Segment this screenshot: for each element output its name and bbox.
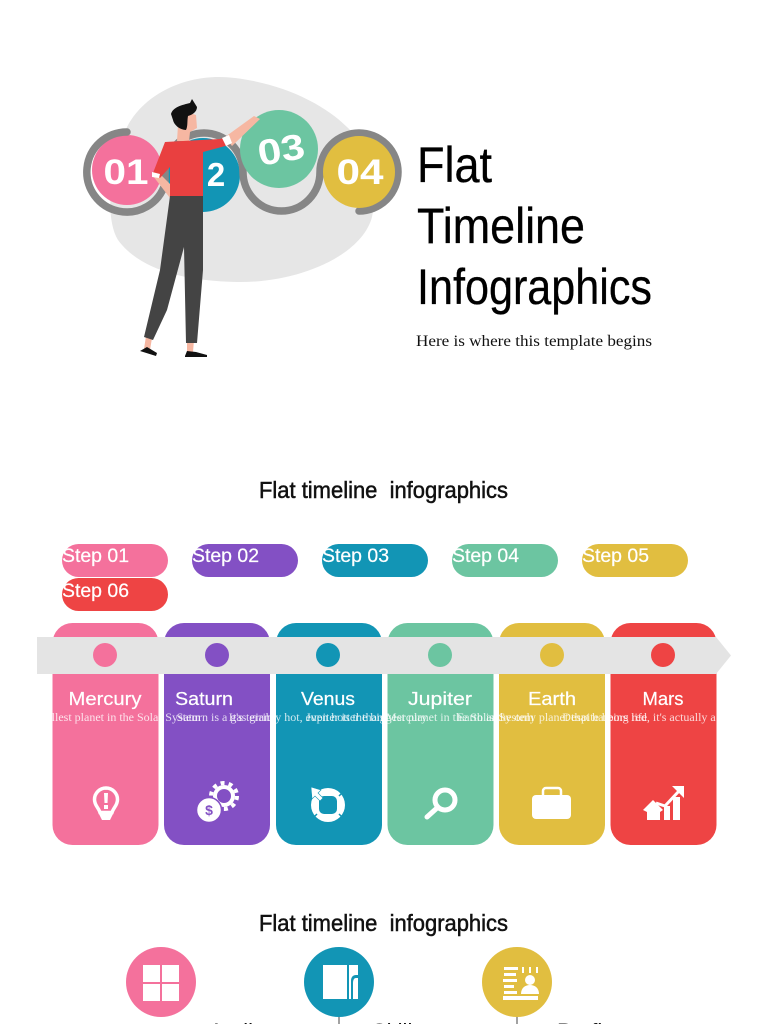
- card descriptions: Jupiter is the biggest planet in the Solar System: [306, 710, 535, 724]
- winding road: [87, 132, 398, 212]
- card: venus: [276, 623, 382, 845]
- subtitle: Here is where this template begins: [416, 333, 652, 350]
- circle 03: [240, 110, 318, 188]
- icon: briefcase: [532, 788, 571, 819]
- card: saturn: [164, 623, 270, 845]
- step pills: [62, 544, 688, 611]
- timeline dots: [93, 643, 675, 667]
- step 05: [582, 544, 688, 577]
- background blob: [110, 77, 374, 282]
- circle 04: [323, 136, 395, 208]
- title: Timeline: [417, 198, 585, 254]
- circle 03: 03: [254, 125, 308, 174]
- card descriptions: Earth is the only planet that harbors life: [457, 710, 647, 724]
- step 01: [62, 544, 168, 577]
- bottom item: pink: [126, 947, 196, 1017]
- icon: magnifier: [427, 790, 455, 817]
- step 04: [452, 544, 558, 577]
- icon: circular target: [311, 787, 345, 822]
- head and neck: [177, 112, 197, 141]
- section heading: bottom: Flat timeline infographics: [259, 910, 508, 936]
- icon: coins and person: [503, 967, 539, 1000]
- card descriptions: [0, 710, 768, 724]
- title: [417, 137, 652, 315]
- hero illustration: [87, 77, 398, 357]
- step 03: [322, 544, 428, 577]
- circle 01: 01: [104, 153, 148, 192]
- step 04: Step 04: [452, 546, 519, 567]
- connector: [338, 1017, 340, 1024]
- card names: Venus: [301, 689, 355, 709]
- lower arm: [153, 176, 172, 198]
- card: mars: [610, 623, 716, 845]
- card names: Saturn: [175, 689, 233, 709]
- bottom item: teal: [304, 947, 374, 1024]
- card descriptions: It's terribly hot, even hotter than Mercury: [229, 710, 427, 724]
- connector: [516, 1017, 518, 1024]
- step 02: Step 02: [192, 546, 259, 567]
- step 06: [62, 578, 168, 611]
- card: earth: [499, 623, 605, 845]
- shoes: [140, 347, 207, 357]
- icon: growth chart: [643, 786, 684, 820]
- icon: notebook and pen: [323, 965, 358, 999]
- circle 01: [92, 135, 162, 205]
- icon: gear and dollar: [196, 783, 237, 822]
- hair: [171, 99, 197, 130]
- icon: light bulb: [94, 788, 118, 820]
- icon: gear and dollar: $: [205, 802, 213, 818]
- card names: Jupiter: [408, 689, 472, 709]
- section heading: timeline: Flat timeline infographics: [259, 477, 508, 503]
- card: jupiter: [388, 623, 494, 845]
- title: Flat: [417, 137, 492, 193]
- step 03: Step 03: [322, 546, 389, 567]
- trousers: [144, 196, 203, 343]
- step 06: Step 06: [62, 581, 129, 602]
- card names: Mars: [642, 689, 684, 709]
- card names: [68, 689, 684, 709]
- circle 04: 04: [336, 153, 384, 192]
- cuffs: [152, 135, 232, 178]
- card descriptions: Despite being red, it's actually a cold place: [562, 710, 768, 724]
- person: [140, 99, 260, 357]
- card descriptions: Saturn is a gas giant: [177, 710, 274, 724]
- raised arm: [225, 116, 260, 146]
- shirt: [153, 137, 229, 196]
- title: Infographics: [417, 259, 652, 315]
- timeline cards: [52, 623, 716, 845]
- card names: Mercury: [68, 689, 142, 709]
- step 01: Step 01: [62, 546, 129, 567]
- card: mercury: [52, 623, 158, 845]
- timeline arrow: [37, 637, 731, 674]
- ankles: [144, 336, 194, 352]
- bottom item: yellow: [482, 947, 552, 1024]
- step 05: Step 05: [582, 546, 649, 567]
- step 02: [192, 544, 298, 577]
- icon: window grid: [143, 965, 179, 1001]
- circle 02: 2: [207, 156, 225, 193]
- card names: Earth: [528, 689, 576, 709]
- bottom labels cut off by the page edge: [209, 1019, 608, 1024]
- circle 02: [166, 138, 240, 212]
